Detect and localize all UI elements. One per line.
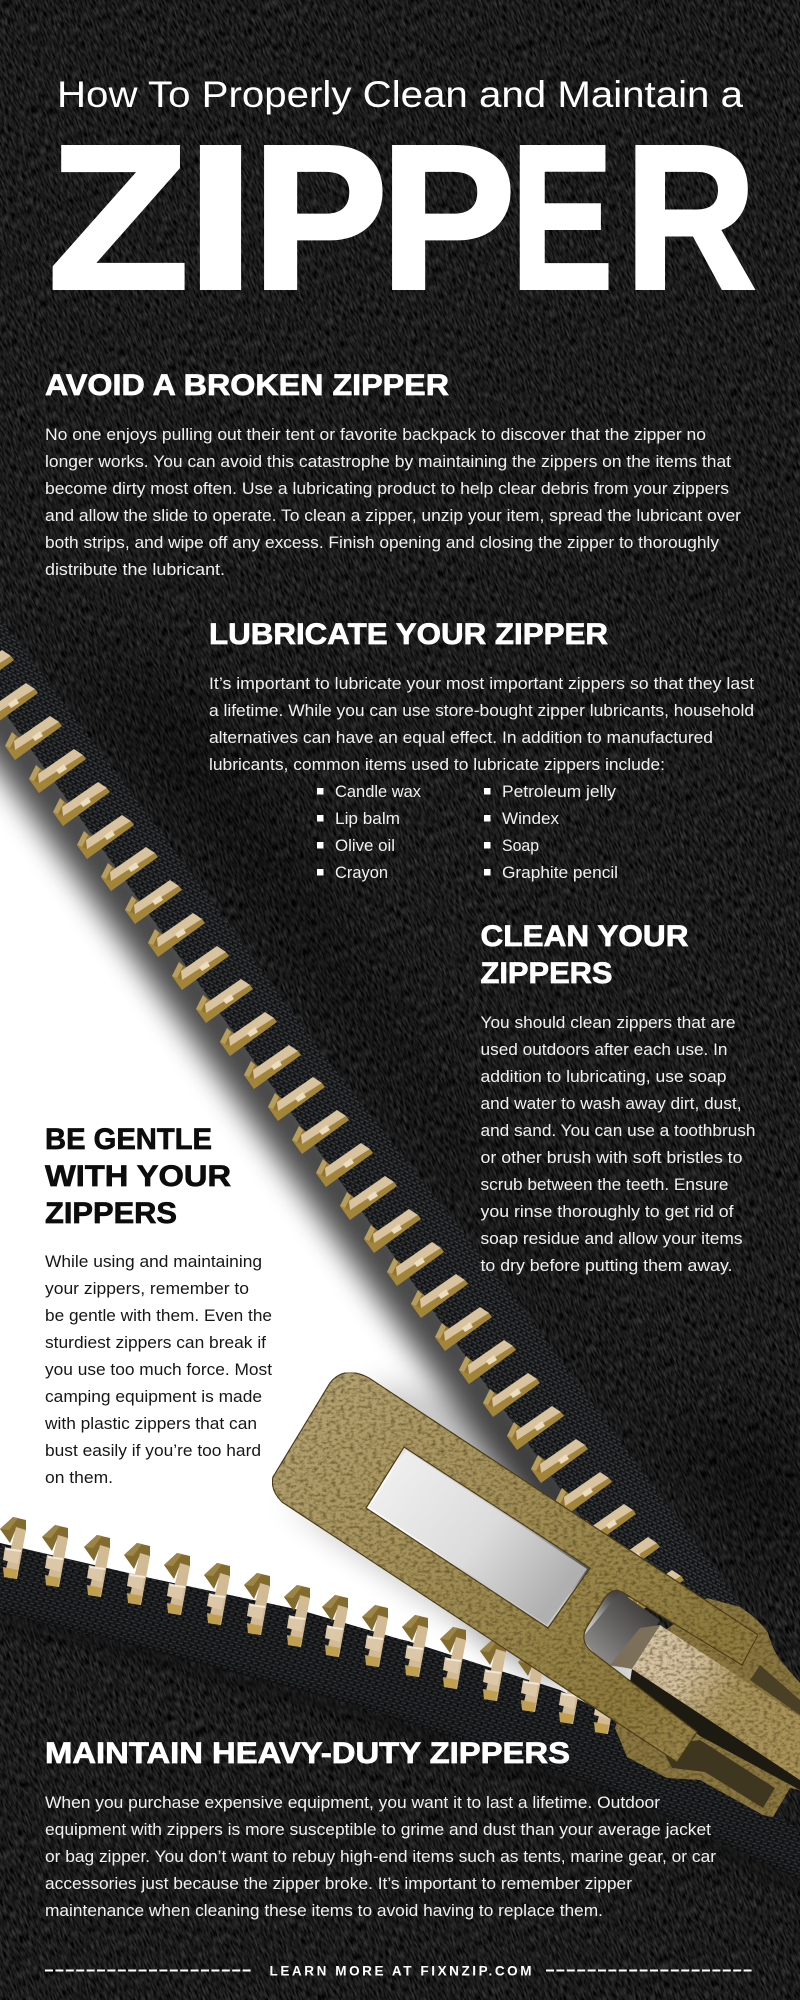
body text: accessories just because the zipper broke. It’s important to remember zipper (45, 1875, 633, 1893)
bullet list: left column (317, 783, 422, 882)
body text: with plastic zippers that can (44, 1415, 257, 1433)
icon: brass zipper slider and pull tab (272, 1373, 800, 1817)
body text: you rinse thoroughly to get rid of (480, 1203, 734, 1221)
bullet list: right column (484, 783, 618, 882)
body text: become dirty most often. Use a lubricating product to help clear debris from your zippers (45, 480, 729, 498)
panel: clean your zippers (480, 920, 756, 1275)
heading: ZIPPERS (480, 957, 612, 990)
body text: or bag zipper. You don’t want to rebuy high-end items such as tents, marine gear, or car (45, 1848, 717, 1866)
zipper: lower teeth row (0, 1517, 617, 1734)
heading (45, 1123, 231, 1230)
big word ZIPPER: Z (48, 103, 189, 332)
body text: be gentle with them. Even the (45, 1307, 272, 1325)
big word ZIPPER: I (186, 103, 256, 332)
body text: scrub between the teeth. Ensure (480, 1176, 728, 1194)
body text (480, 1014, 756, 1275)
body text: soap residue and allow your items (480, 1230, 742, 1248)
zipper: upper tape (0, 570, 800, 1720)
dark fabric shading next to zipper (60, 650, 800, 1560)
body text: sturdiest zippers can break if (45, 1334, 266, 1352)
body text: No one enjoys pulling out their tent or favorite backpack to discover that the zipper no (45, 426, 706, 444)
panel: lubricate your zipper (209, 618, 754, 882)
slider bridge (610, 1625, 800, 1790)
panel: be gentle with your zippers (44, 1123, 272, 1487)
bullet list: left column: Candle wax (335, 783, 422, 801)
body text: bust easily if you’re too hard (45, 1442, 261, 1460)
big word ZIPPER: R (625, 103, 756, 332)
heading: LUBRICATE YOUR ZIPPER (209, 618, 608, 651)
body text: camping equipment is made (45, 1388, 262, 1406)
footer text: LEARN MORE AT FIXNZIP.COM (270, 1964, 532, 1978)
body text: you use too much force. Most (45, 1361, 272, 1379)
body text: longer works. You can avoid this catastrophe by maintaining the zippers on the items that (45, 453, 731, 471)
body text (45, 1794, 717, 1920)
body text: maintenance when cleaning these items to avoid having to replace them. (45, 1902, 603, 1920)
pull tab window showing paper (369, 1450, 587, 1625)
heading: AVOID A BROKEN ZIPPER (45, 369, 449, 402)
panel: avoid a broken zipper (45, 369, 742, 579)
drop shadow of zipper on white (0, 690, 640, 1720)
body text: lubricants, common items used to lubricate zippers include: (209, 756, 665, 774)
big word ZIPPER: P (252, 103, 388, 332)
heading: BE GENTLE (45, 1123, 212, 1156)
title (48, 73, 756, 332)
body text: and sand. You can use a toothbrush (480, 1122, 756, 1140)
body text: on them. (45, 1469, 113, 1487)
body text: It’s important to lubricate your most important zippers so that they last (209, 675, 754, 693)
body text: addition to lubricating, use soap (480, 1068, 726, 1086)
heading: WITH YOUR (45, 1160, 231, 1193)
zipper: upper teeth row (0, 650, 684, 1614)
body text: alternatives can have an equal effect. In addition to manufactured (209, 729, 713, 747)
tape fade into fabric (0, 1618, 800, 1886)
heading: ZIPPERS (45, 1197, 177, 1230)
body text: to dry before putting them away. (480, 1257, 732, 1275)
body text: used outdoors after each use. In (480, 1041, 728, 1059)
white background revealed by open zipper (0, 690, 640, 1730)
big word ZIPPER: E (511, 103, 613, 332)
body text: both strips, and wipe off any excess. Finish opening and closing the zipper to thoroughly (45, 534, 720, 552)
heading: CLEAN YOUR (480, 920, 689, 953)
body text: a lifetime. While you can use store-bought zipper lubricants, household (209, 702, 754, 720)
pull tab (272, 1373, 758, 1762)
body text: and allow the slide to operate. To clean a zipper, unzip your item, spread the lubricant over (45, 507, 742, 525)
heading: MAINTAIN HEAVY-DUTY ZIPPERS (45, 1737, 570, 1770)
body text: equipment with zippers is more susceptible to grime and dust than your average jacket (45, 1821, 711, 1839)
slider dark patches (660, 1665, 800, 1808)
big word ZIPPER: P (380, 103, 516, 332)
body text: When you purchase expensive equipment, you want it to last a lifetime. Outdoor (45, 1794, 661, 1812)
bullet list: left column: Crayon (335, 864, 388, 882)
body text: distribute the lubricant. (45, 561, 225, 579)
body text (209, 675, 754, 774)
panel: maintain heavy-duty zippers (45, 1737, 717, 1920)
bullet list: left column: Lip balm (335, 810, 400, 828)
body text: your zippers, remember to (45, 1280, 249, 1298)
body text: or other brush with soft bristles to (480, 1149, 742, 1167)
body text (45, 426, 742, 579)
body text (44, 1253, 272, 1487)
heading (480, 920, 689, 990)
bullet list: right column: Windex (502, 810, 560, 828)
bullet list: right column: Graphite pencil (502, 864, 618, 882)
body text: You should clean zippers that are (480, 1014, 736, 1032)
slider base (615, 1598, 800, 1817)
slot opening (582, 1592, 660, 1668)
bullet list: right column: Petroleum jelly (502, 783, 617, 801)
subtitle line: How To Properly Clean and Maintain a (57, 73, 743, 115)
zipper: lower tape (0, 1543, 800, 1886)
body text: While using and maintaining (45, 1253, 262, 1271)
bullet list: left column: Olive oil (335, 837, 395, 855)
bullet list: right column: Soap (502, 837, 539, 855)
body text: and water to wash away dirt, dust, (480, 1095, 742, 1113)
